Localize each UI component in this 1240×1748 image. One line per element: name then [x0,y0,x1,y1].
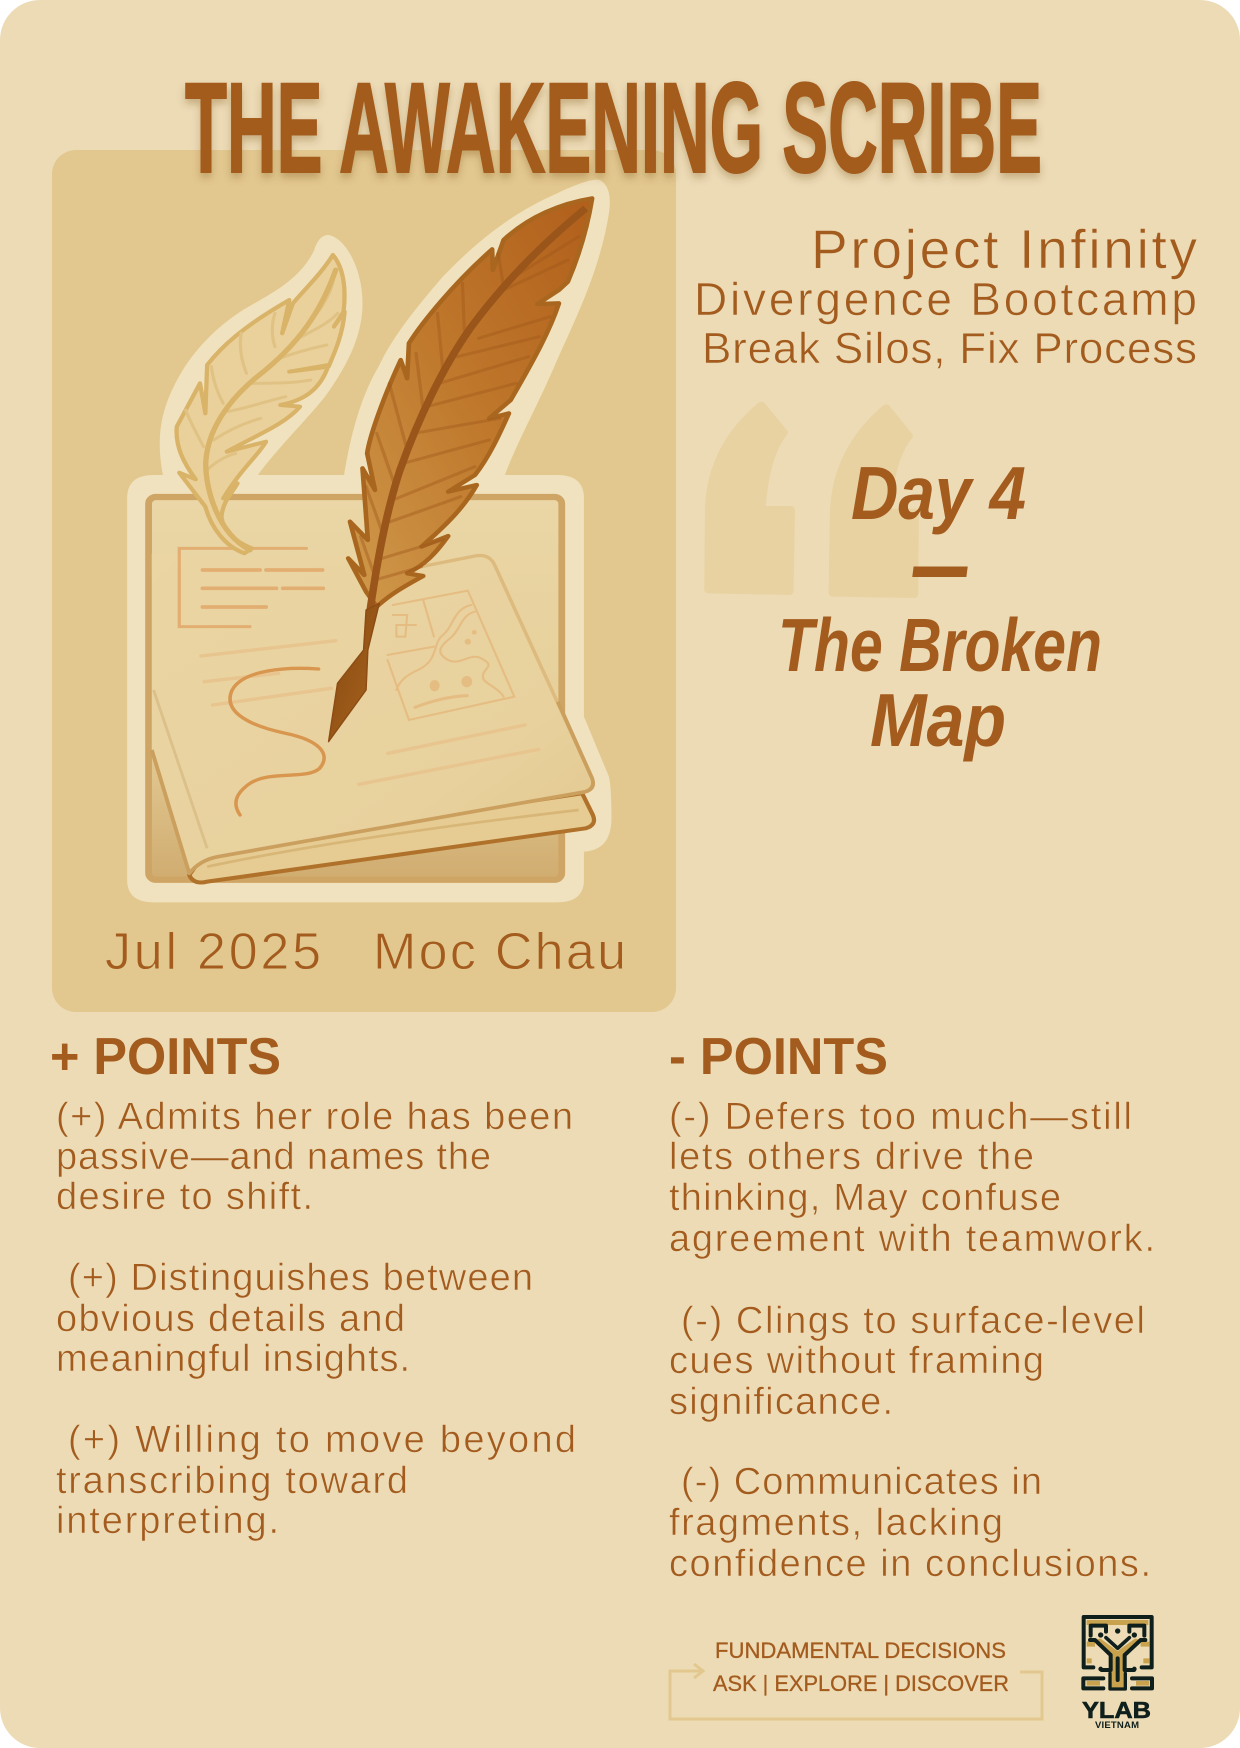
plus point 1 [56,1096,573,1218]
minus point 1: (-) Defers too much—still [669,1096,1132,1138]
session title line 2: Map [870,678,1006,762]
broken map [387,591,514,720]
subtitle line 2: Divergence Bootcamp [694,273,1197,325]
session heading [778,451,1102,762]
plus point 2: meaningful insights. [56,1338,410,1380]
minus point 2: cues without framing [669,1340,1044,1382]
panel: illustration background [52,150,676,1012]
minus point 2 [669,1300,1145,1423]
minus point 2: (-) Clings to surface-level [681,1300,1145,1342]
location: Moc Chau [373,923,626,981]
notebook page backing [149,497,562,880]
plus point 1: desire to shift. [56,1176,313,1218]
icon: quotation marks [709,406,915,594]
logo subtitle: VIETNAM [1095,1720,1139,1731]
minus point 2: significance. [669,1381,893,1423]
sticker outline [127,180,611,902]
date: Jul 2025 [105,923,321,981]
minus point 3: confidence in conclusions. [669,1543,1151,1585]
feather shaft [370,208,586,613]
plus heading: + POINTS [50,1028,281,1086]
minus point 3: (-) Communicates in [681,1461,1042,1503]
faint text lines [201,641,539,784]
tagline line 2: ASK | EXPLORE | DISCOVER [713,1671,1009,1696]
minus point 1: thinking, May confuse [669,1177,1061,1219]
subtitle line 1: Project Infinity [811,218,1198,280]
open book [152,548,594,882]
project subtitle [694,218,1198,373]
logo wordmark: YLAB [1082,1697,1151,1723]
book top page [152,553,593,873]
plus point 3 [56,1419,576,1542]
plus point 3: (+) Willing to move beyond [68,1419,576,1461]
small pale feather [177,255,345,553]
logo: YLAB Vietnam [1082,1617,1152,1731]
ink squiggle [230,668,324,815]
large brown feather [348,198,592,613]
plus point 3: transcribing toward [56,1460,408,1502]
date and location [105,923,626,981]
subtitle line 3: Break Silos, Fix Process [702,324,1197,373]
footer tagline [713,1638,1009,1696]
plus point 1: (+) Admits her role has been [56,1096,573,1138]
minus point 1: agreement with teamwork. [669,1218,1155,1260]
panel: plus points [50,1028,576,1542]
session title line 1: The Broken [778,603,1102,687]
plus point 2: obvious details and [56,1298,405,1340]
minus point 1 [669,1096,1155,1260]
feather barbs [361,237,579,580]
panel: minus points [669,1028,1155,1585]
dash: — [913,524,967,608]
day number: Day 4 [851,451,1026,535]
arrow: footer loop [670,1664,1042,1719]
quill nib [329,603,379,742]
note card lines [179,548,323,627]
logo mark [1083,1617,1152,1689]
plus point 3: interpreting. [56,1500,279,1542]
tagline line 1: FUNDAMENTAL DECISIONS [715,1638,1006,1663]
plus point 1: passive—and names the [56,1136,491,1178]
minus point 3 [669,1461,1151,1585]
small feather barbs [186,277,337,470]
minus heading: - POINTS [669,1028,888,1086]
book lower cover [189,793,594,882]
minus point 1: lets others drive the [669,1136,1034,1178]
plus point 2: (+) Distinguishes between [68,1257,533,1299]
illustration: quill and open book [127,180,611,902]
minus point 3: fragments, lacking [669,1502,1003,1544]
plus point 2 [56,1257,533,1380]
